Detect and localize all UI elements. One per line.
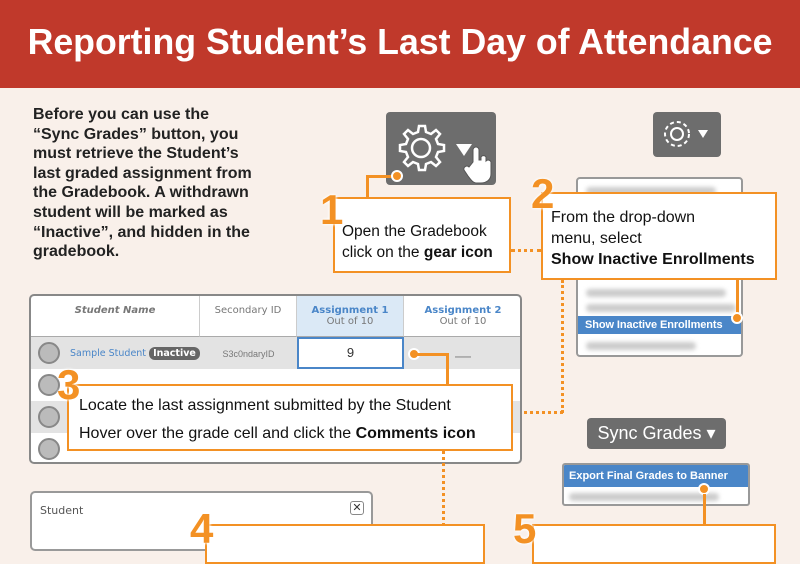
- gradebook table: —: [455, 348, 471, 365]
- callout 3: Locate the last assignment submitted by the Student: [79, 397, 451, 414]
- callout 3: [67, 384, 513, 451]
- gradebook table: Assignment 1: [312, 305, 388, 316]
- sync grades button: [587, 418, 726, 449]
- intro text: “Inactive”, and hidden in the: [33, 224, 250, 241]
- callout 2: From the drop-down: [551, 209, 695, 226]
- callout 1: click on the gear icon: [342, 244, 493, 261]
- icon: gear button: [386, 112, 496, 185]
- gradebook table: 9: [347, 345, 354, 360]
- number 1: 1: [320, 186, 343, 233]
- small gear button: [653, 112, 721, 157]
- intro text: gradebook.: [33, 243, 119, 260]
- callout 3: Hover over the grade cell and click the Comments icon: [79, 425, 476, 442]
- sync dropdown: [562, 463, 750, 506]
- intro text: “Sync Grades” button, you: [33, 126, 238, 143]
- gradebook table: [29, 294, 522, 464]
- student dialog: ✕: [352, 502, 362, 514]
- callout 4: [205, 524, 485, 564]
- sync dropdown: Export Final Grades to Banner: [569, 470, 728, 482]
- gradebook table: Student Name: [75, 305, 155, 316]
- number 3: 3: [57, 361, 80, 408]
- highlighted menu item: Show Inactive Enrollments: [585, 319, 722, 331]
- callout 1: [333, 197, 511, 273]
- number 4: 4: [190, 505, 213, 552]
- gradebook table: Secondary ID: [215, 305, 281, 316]
- dotted connector 2-3: [561, 280, 564, 413]
- dropdown menu: [576, 177, 743, 357]
- title banner: Reporting Student’s Last Day of Attendance: [28, 22, 772, 62]
- gradebook table: Out of 10: [440, 316, 486, 327]
- intro text: the Gradebook. A withdrawn: [33, 184, 249, 201]
- highlighted menu item: [578, 316, 741, 334]
- number 5: 5: [513, 505, 536, 552]
- callout 1: Open the Gradebook: [342, 223, 487, 240]
- number 2: 2: [531, 170, 554, 217]
- intro text: must retrieve the Student’s: [33, 145, 239, 162]
- gradebook table: Sample Student Inactive: [70, 348, 196, 359]
- callout 5: [532, 524, 776, 564]
- intro text: Before you can use the: [33, 106, 209, 123]
- student dialog: [30, 491, 373, 551]
- connector 2: [736, 280, 738, 318]
- gradebook table: Assignment 2: [425, 305, 501, 316]
- sync grades button: Sync Grades ▾: [597, 423, 716, 443]
- student dialog: Student: [40, 504, 83, 517]
- gradebook table: Out of 10: [327, 316, 373, 327]
- callout 2: menu, select: [551, 230, 642, 247]
- connector 1: [366, 175, 368, 199]
- intro text: last graded assignment from: [33, 165, 252, 182]
- dotted connector 1-2: [511, 249, 541, 252]
- gradebook table: S3c0ndaryID: [222, 349, 275, 359]
- intro text: student will be marked as: [33, 204, 228, 221]
- intro text: [33, 106, 252, 260]
- callout 2: Show Inactive Enrollments: [551, 251, 755, 268]
- connector 3: [408, 348, 420, 360]
- dotted connector 3-4: [442, 451, 445, 526]
- connector 5: [698, 483, 710, 495]
- title banner: [0, 0, 800, 88]
- callout 2: [541, 192, 777, 280]
